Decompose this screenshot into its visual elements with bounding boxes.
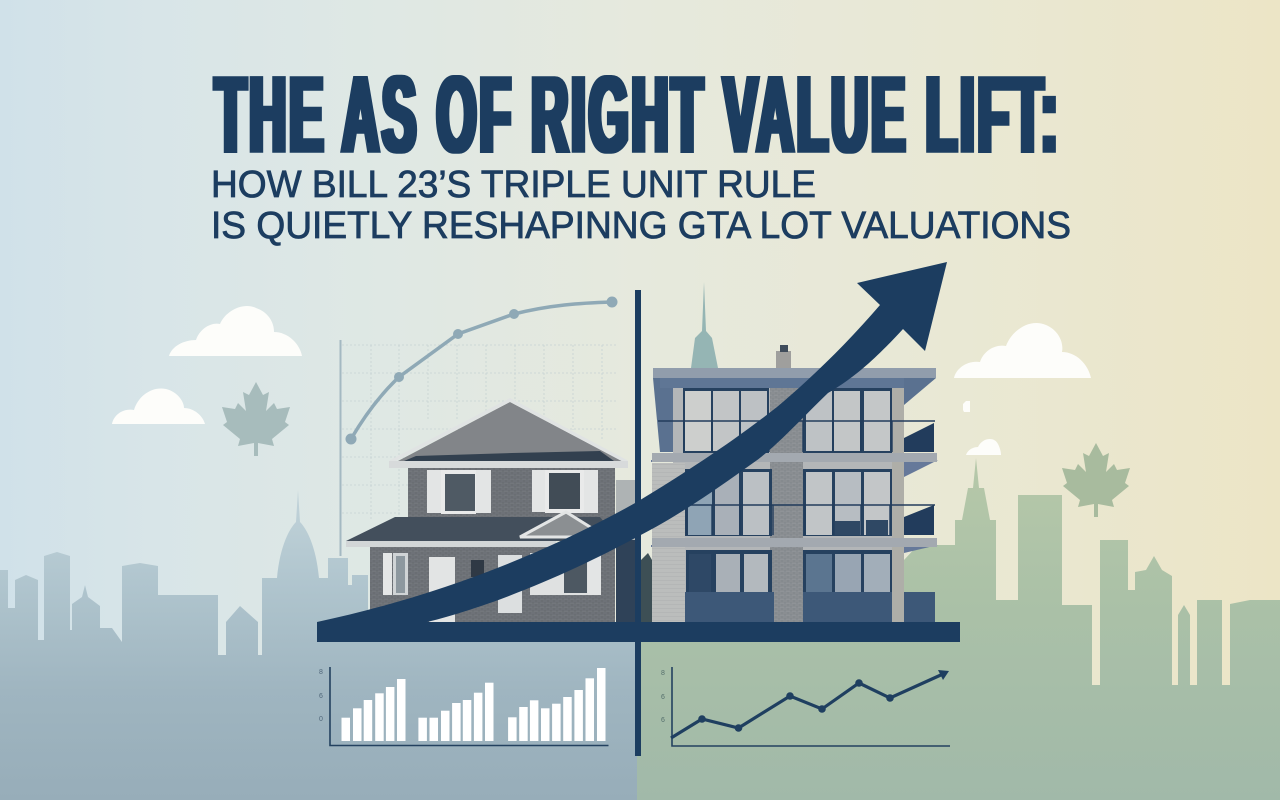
porch gable bbox=[520, 512, 590, 537]
second slab underside bbox=[651, 460, 938, 477]
left soffit bbox=[653, 378, 673, 452]
subtitle line one: HOW BILL 23’S TRIPLE UNIT RULE bbox=[211, 164, 816, 206]
third slab bbox=[652, 538, 937, 547]
top windows left bbox=[683, 388, 769, 453]
line chart tick labels: 8 bbox=[661, 670, 665, 677]
cloud right bbox=[954, 323, 1091, 378]
bottom windows right bbox=[803, 550, 892, 622]
window right lower bbox=[498, 553, 601, 613]
bars group two bbox=[418, 683, 494, 741]
building wall bbox=[673, 378, 904, 622]
house lower roof bbox=[346, 517, 620, 541]
bar chart tick labels bbox=[319, 669, 323, 723]
rising arrow bbox=[317, 262, 947, 622]
third slab underside bbox=[651, 545, 938, 553]
saturating curve line chart bbox=[346, 296, 618, 444]
maple leaf right bbox=[1062, 443, 1130, 517]
house lower fascia bbox=[346, 541, 556, 547]
house upper wall bbox=[408, 466, 615, 522]
house side wall bbox=[616, 480, 635, 540]
house gable trim bbox=[390, 400, 627, 462]
base line bbox=[317, 622, 960, 642]
bar chart axes bbox=[330, 667, 608, 746]
soffit underside bbox=[660, 378, 904, 388]
middle balcony railing bbox=[687, 505, 935, 535]
bars group one bbox=[342, 679, 406, 741]
title bbox=[211, 54, 1071, 247]
cloud large left bbox=[169, 306, 302, 356]
bar chart tick labels: 8 bbox=[319, 669, 323, 676]
bar chart bbox=[319, 667, 608, 746]
house lower wall bbox=[370, 544, 615, 622]
line chart points bbox=[698, 679, 894, 732]
window right upper bbox=[532, 470, 598, 513]
bottom balcony railings bbox=[685, 592, 935, 622]
dotted grid behind curve bbox=[342, 345, 616, 520]
maple leaf left bbox=[222, 382, 290, 456]
right wall bbox=[892, 388, 904, 622]
window left lower bbox=[383, 553, 408, 595]
line chart series bbox=[671, 674, 943, 738]
window left upper bbox=[427, 470, 491, 514]
right skyline silhouette bbox=[637, 458, 1280, 800]
second slab bbox=[652, 453, 937, 462]
rising line chart bbox=[661, 667, 950, 746]
line chart tick labels bbox=[661, 670, 665, 724]
top windows right bbox=[803, 388, 892, 453]
house bbox=[346, 400, 635, 622]
apartment building bbox=[651, 345, 938, 622]
line chart axes bbox=[672, 667, 950, 746]
middle balcony side bbox=[904, 505, 934, 535]
house fascia bbox=[389, 461, 628, 468]
bars group three bbox=[508, 668, 606, 741]
bar chart tick labels: 0 bbox=[319, 716, 323, 723]
bar chart tick labels: 6 bbox=[319, 693, 323, 700]
left skyline silhouette bbox=[0, 490, 637, 800]
cloud small left bbox=[112, 388, 205, 424]
distant tower behind apartment bbox=[691, 282, 718, 368]
centre divider line bbox=[635, 290, 641, 756]
line chart tick labels: 6 bbox=[661, 694, 665, 701]
chimney bbox=[776, 345, 791, 368]
right soffit bbox=[904, 378, 936, 405]
top balcony side bbox=[904, 423, 934, 452]
line chart tick labels: 6 bbox=[661, 717, 665, 724]
chart axis pale bbox=[340, 340, 342, 556]
cloud fragment bbox=[963, 401, 970, 412]
middle windows right bbox=[803, 469, 892, 536]
middle balcony furniture bbox=[835, 520, 888, 535]
cloud tiny right bbox=[966, 439, 1001, 455]
house gable bbox=[398, 402, 622, 461]
top balcony railing bbox=[658, 421, 935, 452]
roof slab bbox=[653, 368, 936, 378]
door left bbox=[429, 557, 484, 622]
brick column bbox=[770, 388, 803, 622]
pale wall lower left bbox=[652, 463, 685, 622]
line chart arrowhead bbox=[938, 670, 949, 680]
tree beside apartment bbox=[641, 553, 652, 622]
middle windows left bbox=[685, 469, 772, 536]
house side detail bbox=[616, 540, 635, 622]
bottom windows left bbox=[686, 550, 772, 622]
subtitle line two: IS QUIETLY RESHAPINNG GTA LOT VALUATIONS bbox=[211, 205, 1071, 247]
house roof strip bbox=[404, 451, 614, 461]
